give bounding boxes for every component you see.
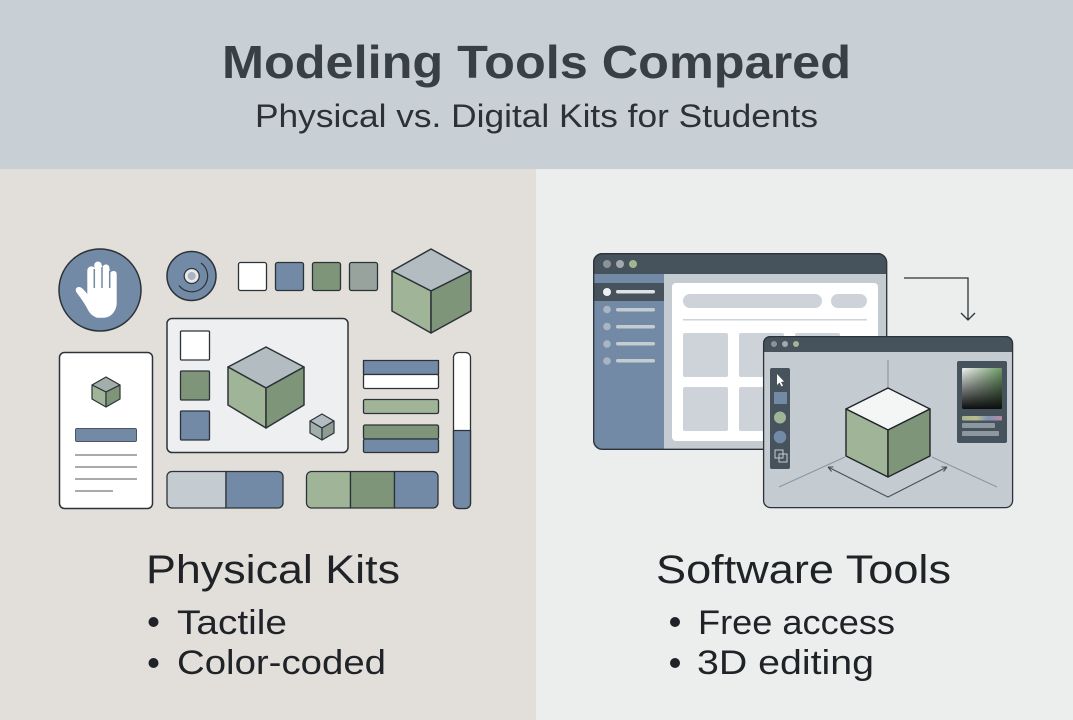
subtitle: Physical vs. Digital Kits for Students	[255, 98, 818, 134]
icon: small cube on card	[92, 377, 120, 407]
panel: physical kit illustration	[59, 249, 471, 509]
list: physical kits features: Tactile	[177, 604, 287, 642]
3D axes	[779, 360, 997, 487]
front 3D editor window	[763, 336, 1013, 508]
editor title bar	[763, 336, 1013, 352]
sidebar	[593, 274, 664, 450]
heading: software tools: Software Tools	[656, 548, 951, 592]
list: physical kits features: Color-coded	[177, 644, 386, 682]
instruction card	[60, 352, 152, 508]
title: Modeling Tools Compared	[222, 36, 851, 88]
card text lines	[75, 455, 137, 491]
icon: mini cube	[310, 414, 334, 440]
sidebar menu items	[603, 288, 655, 365]
panel: software illustration	[593, 253, 1013, 508]
three-color block	[306, 472, 438, 508]
heading: physical kits: Physical Kits	[146, 548, 400, 592]
list: software tools features: 3D editing	[697, 644, 874, 682]
panel: software tools background	[536, 169, 1073, 720]
vertical bar	[453, 352, 471, 509]
list: software tools features: Free access	[698, 604, 895, 642]
tool palette	[770, 368, 790, 469]
panel: physical kits background	[0, 169, 536, 720]
icon: hand in circle	[59, 249, 141, 331]
arrow: elbow connector	[904, 278, 975, 320]
stacked bars	[364, 360, 438, 452]
window title bar	[593, 253, 887, 274]
two-color block	[167, 472, 283, 508]
color picker panel	[957, 361, 1007, 443]
card heading bar	[76, 428, 136, 442]
list: physical kits features	[148, 604, 386, 682]
icon: editor cube	[846, 388, 930, 477]
central tray	[167, 318, 348, 452]
dimension arrows	[828, 467, 947, 497]
list: software tools features	[670, 604, 895, 682]
panel: header band	[0, 0, 1073, 169]
content pane	[672, 283, 878, 441]
icon: tray cube	[228, 347, 304, 428]
icon: disc	[167, 252, 216, 300]
back application window	[593, 253, 887, 450]
icon: large cube	[392, 249, 471, 333]
color swatches	[238, 262, 378, 290]
tray swatches	[180, 331, 210, 440]
